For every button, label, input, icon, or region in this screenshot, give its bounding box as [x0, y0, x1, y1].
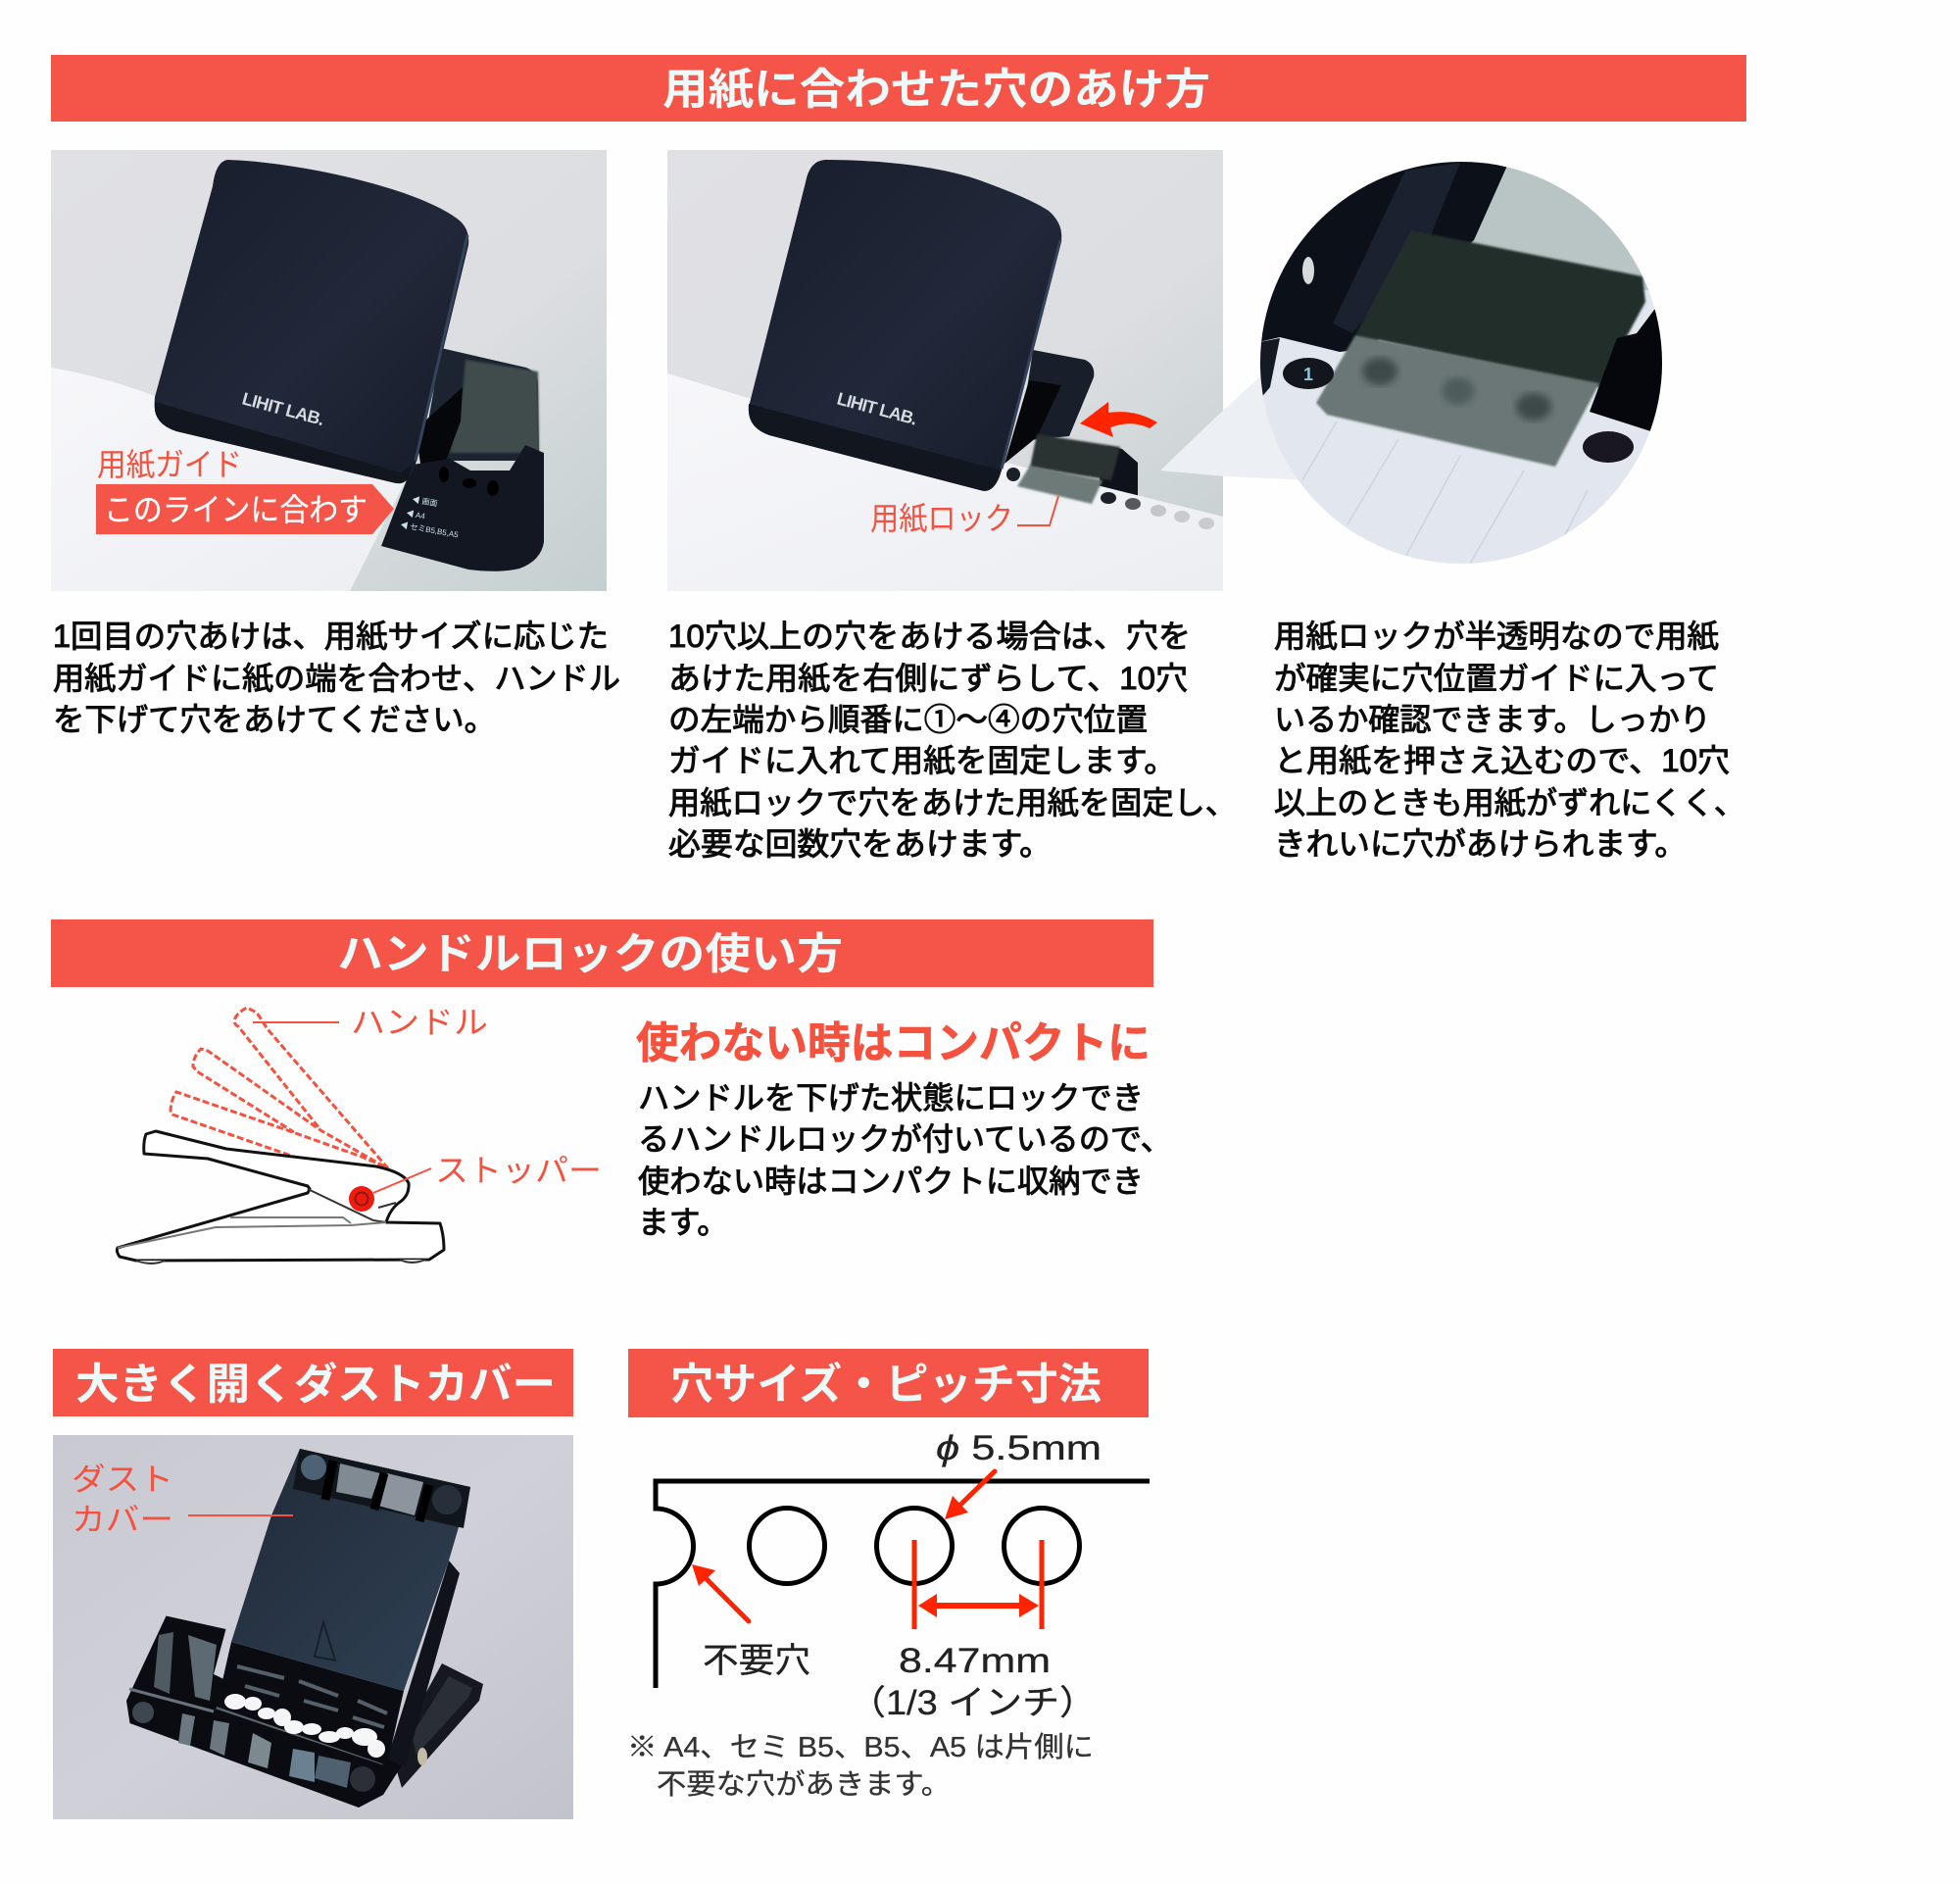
label: stopper [373, 1153, 602, 1193]
diagram: hole size and pitch [656, 1471, 1150, 1688]
label: dust cover [72, 1462, 293, 1537]
zoom callout wedge [1160, 375, 1313, 480]
label: pitch [849, 1642, 1097, 1722]
pitch lines and double arrow [914, 1540, 1042, 1629]
label: dust cover: カバー [72, 1502, 173, 1537]
text: column 3 [1274, 619, 1745, 862]
text: column 2 [668, 619, 1237, 862]
logo text: LIHIT LAB. [835, 389, 919, 429]
note: ※ A4、セミ B5、B5、A5 は片側に [627, 1731, 1094, 1763]
text: handle lock description [638, 1080, 1172, 1240]
text: column 1: 用紙ガイドに紙の端を合わせ、ハンドル [53, 661, 620, 696]
icon: stopper dot [349, 1186, 374, 1212]
text: column 3: きれいに穴があけられます。 [1274, 826, 1687, 862]
photo: dust cover [53, 1435, 573, 1819]
label: hole diameter: ϕ 5.5mm [936, 1429, 1102, 1467]
banner: paper hole punching: 用紙に合わせた穴のあけ方 [662, 66, 1210, 114]
banner: paper hole punching [51, 55, 1746, 122]
text: handle lock description: ハンドルを下げた状態にロックでき [638, 1080, 1144, 1116]
text: column 1: 1回目の穴あけは、用紙サイズに応じた [53, 619, 609, 654]
banner: hole size and pitch [628, 1349, 1149, 1417]
dust confetti [224, 1694, 385, 1758]
note [627, 1731, 1094, 1801]
text: column 3: 以上のときも用紙がずれにくく、 [1274, 785, 1745, 820]
photo: paper lock [667, 150, 1223, 591]
text: column 3: が確実に穴位置ガイドに入って [1274, 661, 1719, 696]
text: column 2: 必要な回数穴をあけます。 [668, 826, 1052, 862]
label: paper guide: 用紙ガイド [97, 447, 242, 482]
banner: handle lock: ハンドルロックの使い方 [337, 930, 843, 978]
banner: hole size and pitch: 穴サイズ・ピッチ寸法 [670, 1361, 1102, 1409]
text: handle lock description: るハンドルロックが付いているので、 [638, 1121, 1172, 1157]
text: column 2: ガイドに入れて用紙を固定します。 [668, 743, 1176, 778]
text: column 3: と用紙を押さえ込むので、10穴 [1274, 743, 1730, 778]
heading: compact when not in use: 使わない時はコンパクトに [636, 1019, 1151, 1067]
text: column 3: いるか確認できます。しっかり [1274, 702, 1711, 737]
icon: red curved arrow [1080, 402, 1157, 437]
text: column 2: 用紙ロックで穴をあけた用紙を固定し、 [668, 785, 1237, 820]
logo text: LIHIT LAB. [240, 389, 326, 429]
banner: handle lock [51, 919, 1153, 987]
text: column 2: あけた用紙を右側にずらして、10穴 [668, 661, 1188, 696]
label: handle: ハンドル [351, 1005, 488, 1040]
hole number: 1 [1303, 365, 1313, 384]
label: pitch: （1/3 インチ） [849, 1684, 1097, 1722]
photo: paper guide: ◀ セミB5,B5,A5 [400, 521, 460, 539]
photo: paper guide: ◀ 画面 [412, 495, 438, 509]
text: handle lock description: 使わない時はコンパクトに収納でき [638, 1164, 1144, 1199]
callout arrow: align to this line [96, 484, 394, 534]
arrow: unneeded hole [692, 1564, 749, 1621]
text: column 3: 用紙ロックが半透明なので用紙 [1274, 619, 1719, 654]
photo: paper guide [51, 150, 607, 591]
note: 不要な穴があきます。 [657, 1768, 951, 1801]
label: unneeded hole: 不要穴 [703, 1642, 810, 1680]
text: column 1 [53, 619, 620, 737]
banner: dust cover [53, 1349, 573, 1416]
banner: dust cover: 大きく開くダストカバー [75, 1361, 556, 1409]
text: column 1: を下げて穴をあけてください。 [53, 702, 496, 737]
diagram: handle lock side view [117, 1008, 444, 1264]
callout arrow: align to this line: このラインに合わす [104, 492, 368, 527]
photo: paper guide: ◀ A4 [406, 509, 426, 521]
dashed handle positions [171, 1008, 388, 1168]
text: column 2: 10穴以上の穴をあける場合は、穴を [668, 619, 1191, 654]
label: pitch: 8.47mm [899, 1642, 1051, 1680]
circular detail: translucent paper lock [1260, 162, 1662, 564]
label: dust cover: ダスト [72, 1462, 173, 1497]
arrow: diameter [945, 1471, 995, 1519]
text: handle lock description: ます。 [638, 1205, 728, 1240]
label: stopper: ストッパー [435, 1153, 602, 1188]
text: column 2: の左端から順番に①〜④の穴位置 [668, 702, 1148, 737]
label: paper lock: 用紙ロック [870, 501, 1013, 536]
